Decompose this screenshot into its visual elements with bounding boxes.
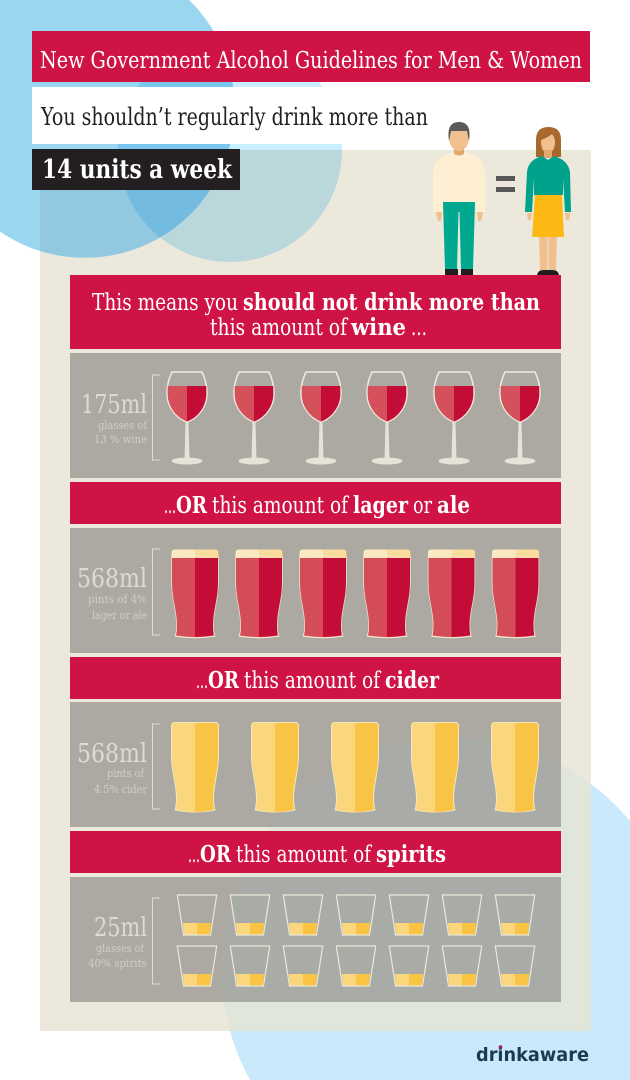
panel: wine heading: this amount of	[210, 315, 348, 341]
callout: 14 units a week	[32, 149, 240, 190]
cider label: pints of	[107, 766, 145, 780]
panel: wine heading: should not drink more than	[243, 289, 540, 316]
heading: lager or ale: this amount of	[212, 493, 349, 519]
subtitle band	[32, 87, 590, 144]
spirits label	[88, 898, 160, 984]
panel: wine heading: This means you	[92, 290, 238, 316]
heading: lager or ale: OR	[176, 492, 208, 519]
heading: lager or ale: ...	[164, 493, 176, 519]
lager label	[77, 549, 160, 635]
wine label: 175ml	[81, 390, 147, 420]
panel: wine heading: …	[411, 315, 427, 341]
heading: lager or ale: or	[413, 493, 432, 519]
background circle: overlapping translucent	[118, 38, 342, 262]
callout: 14 units a week: 14 units a week	[42, 155, 233, 185]
heading: lager or ale: lager	[353, 492, 409, 519]
wine glasses	[167, 372, 540, 464]
spirits label: 25ml	[94, 913, 147, 943]
heading: spirits: OR	[200, 841, 232, 868]
logo: drinkaware: drinkaware	[476, 1044, 589, 1066]
panel: spirits	[70, 877, 561, 1002]
panel: lager	[70, 528, 561, 653]
cider label: 4.5% cider	[94, 782, 147, 796]
cider pints	[172, 722, 538, 812]
title	[32, 31, 590, 82]
panel: wine	[70, 353, 561, 478]
heading: lager or ale: ale	[437, 492, 470, 519]
heading: spirits: this amount of	[236, 842, 372, 868]
heading: spirits	[70, 831, 561, 873]
icon: equals sign	[496, 176, 515, 192]
lager pints	[172, 550, 539, 638]
lager label: lager or ale	[92, 608, 147, 622]
heading: cider: ...	[196, 668, 208, 694]
background circle: top left blue	[0, 0, 235, 258]
heading: lager or ale	[70, 482, 561, 524]
cider label: 568ml	[77, 739, 147, 769]
heading: spirits: ...	[188, 842, 200, 868]
lager label: pints of 4%	[88, 592, 147, 606]
spirits label: 40% spirits	[88, 956, 147, 970]
panel: beige backdrop	[40, 150, 591, 1031]
panel: cider	[70, 702, 561, 827]
background circle: bottom right light blue	[221, 738, 630, 1080]
heading: cider: this amount of	[244, 668, 381, 694]
spirits label: glasses of	[96, 941, 145, 955]
wine label: 13 % wine	[94, 432, 147, 446]
panel: wine heading	[70, 275, 561, 349]
subtitle band: You shouldn’t regularly drink more than	[40, 103, 428, 131]
heading: cider: cider	[385, 667, 440, 694]
lager label: 568ml	[77, 564, 147, 594]
cider label	[77, 724, 160, 809]
icon: man	[433, 122, 485, 275]
wine label	[81, 375, 160, 460]
wine label: glasses of	[98, 418, 148, 432]
icon: woman	[525, 127, 571, 275]
heading: spirits: spirits	[376, 841, 446, 868]
panel: wine heading: wine	[350, 314, 406, 341]
spirit glasses	[177, 895, 535, 986]
heading: cider: OR	[208, 667, 240, 694]
heading: cider	[70, 657, 561, 699]
